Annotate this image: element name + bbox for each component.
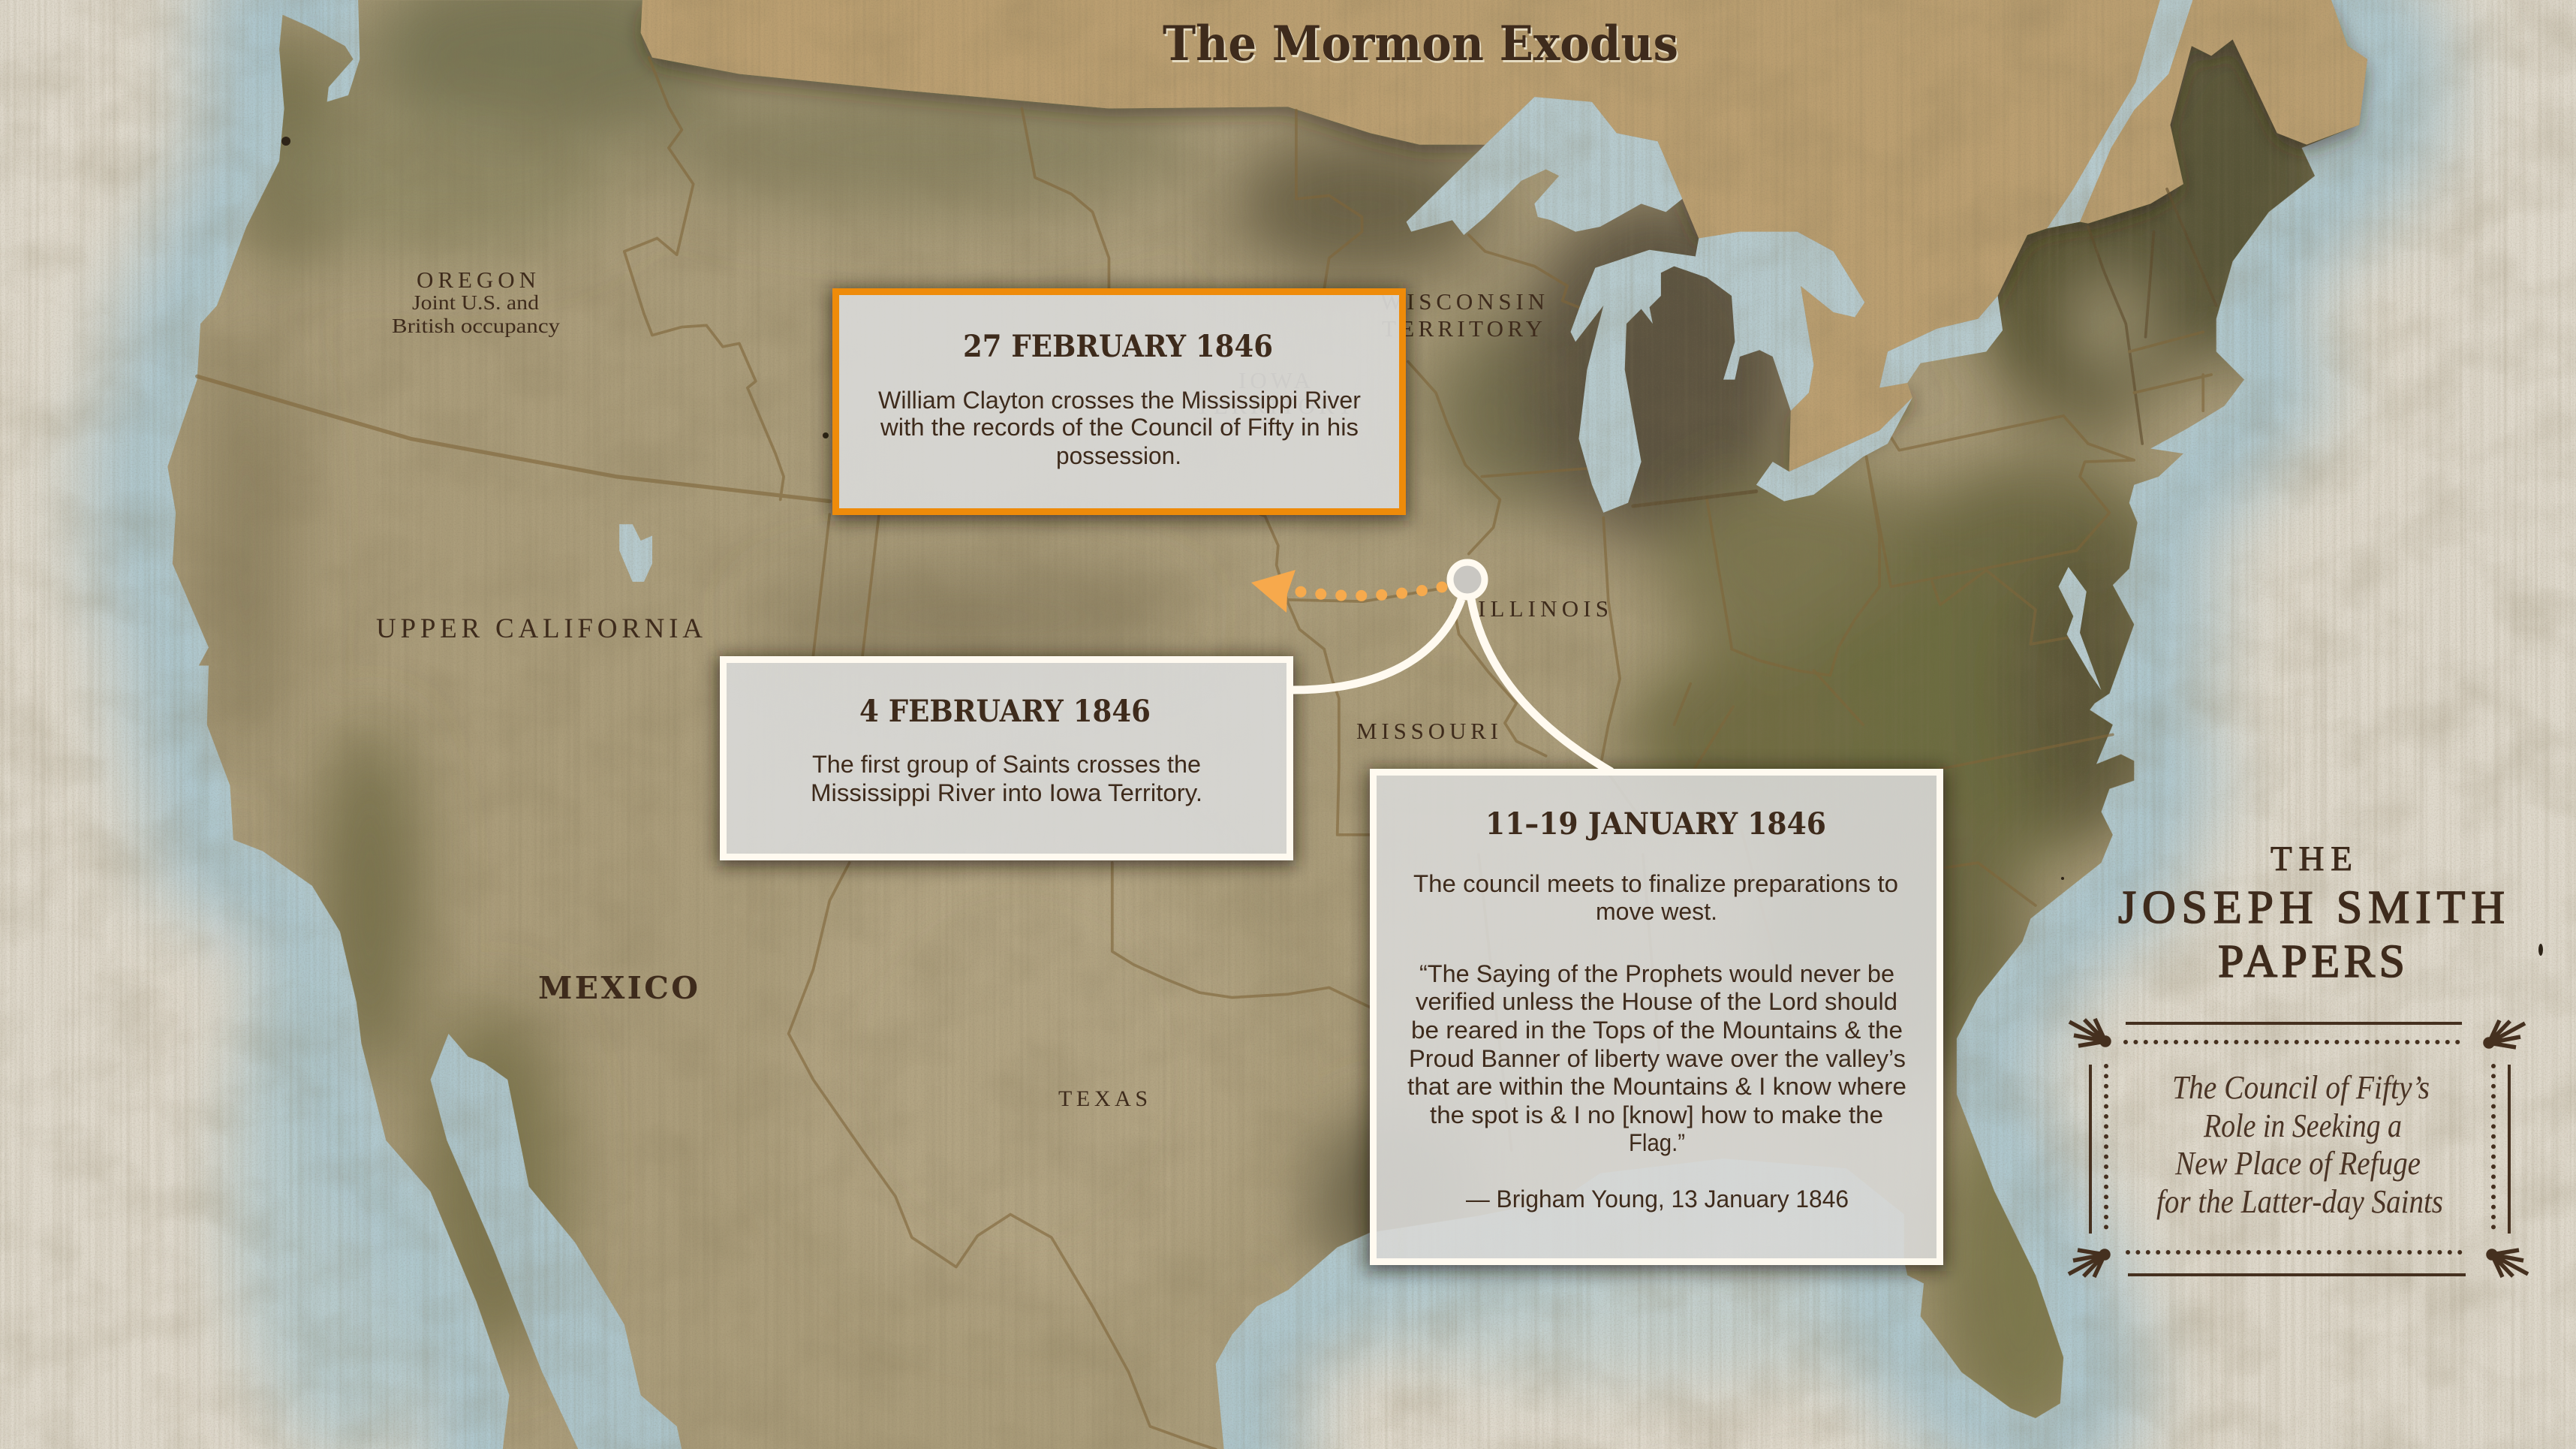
state and territory borders xyxy=(197,58,2216,1449)
callout shadows xyxy=(717,288,1946,1271)
label: Iowa Territory: IOWA xyxy=(1238,367,1311,393)
callout summary: The council meets to finalize preparations to xyxy=(1413,870,1898,897)
callout: 4 February 1846 xyxy=(724,659,1290,857)
publisher logo: The Joseph Smith Papers: PAPERS xyxy=(2218,936,2405,987)
label: Oregon: Joint U.S. and xyxy=(412,291,540,314)
label: Iowa Territory: TERRITORY xyxy=(1196,393,1353,419)
callout: 27 February 1846 xyxy=(836,291,1402,512)
subtitle: The Council of Fifty's Role: The Council of Fifty’s xyxy=(2172,1069,2430,1106)
region labels xyxy=(376,267,1608,1111)
callout quotation: Proud Banner of liberty wave over the valley’s xyxy=(1409,1045,1906,1072)
callout quotation: verified unless the House of the Lord should xyxy=(1416,988,1897,1015)
label: Oregon: OREGON xyxy=(417,267,536,293)
callout body: The first group of Saints crosses the xyxy=(812,751,1201,778)
Great Lakes and St. Lawrence xyxy=(619,0,2195,690)
callout summary xyxy=(1413,870,1898,925)
callout heading: 4 FEBRUARY 1846 xyxy=(859,694,1151,729)
publisher logo: The Joseph Smith Papers: THE xyxy=(2271,839,2352,878)
callout heading: 27 FEBRUARY 1846 xyxy=(963,329,1273,364)
callout body xyxy=(811,751,1202,806)
callout quotation: that are within the Mountains & I know where xyxy=(1407,1073,1906,1100)
label: Missouri: MISSOURI xyxy=(1356,718,1498,744)
callout body: Mississippi River into Iowa Territory. xyxy=(811,779,1202,806)
leader line to 4 February callout xyxy=(1293,599,1461,690)
callout body xyxy=(878,387,1361,469)
dotted arrow line: Clayton crossing xyxy=(1295,587,1442,595)
label: Upper California: UPPER CALIFORNIA xyxy=(376,613,703,644)
label: Wisconsin Territory xyxy=(1380,288,1545,342)
leader line to January callout xyxy=(1471,599,1612,772)
callout body: William Clayton crosses the Mississippi River xyxy=(878,387,1361,414)
map title: The Mormon Exodus xyxy=(1163,16,1678,72)
label: Iowa Territory xyxy=(1196,367,1353,419)
publisher logo: The Joseph Smith Papers xyxy=(2118,839,2505,987)
label: Oregon: British occupancy xyxy=(392,315,561,337)
publisher logo: The Joseph Smith Papers: JOSEPH SMITH xyxy=(2118,882,2505,933)
callout quotation: “The Saying of the Prophets would never be xyxy=(1419,960,1894,987)
subtitle: The Council of Fifty's Role: Role in Seeking a xyxy=(2203,1107,2402,1144)
label: Texas: TEXAS xyxy=(1058,1086,1148,1111)
label: Mexico: MEXICO xyxy=(538,970,698,1006)
callout summary: move west. xyxy=(1596,898,1717,925)
callout quotation: be reared in the Tops of the Mountains & the xyxy=(1411,1017,1903,1044)
label: Wisconsin Territory: WISCONSIN xyxy=(1380,288,1545,315)
arrow head xyxy=(1251,570,1296,613)
specks and stains xyxy=(281,137,2543,956)
label: Wisconsin Territory: TERRITORY xyxy=(1382,315,1542,342)
callout: 11–19 January 1846 xyxy=(1374,772,1940,1261)
subtitle: The Council of Fifty's Role xyxy=(2156,1069,2443,1220)
subtitle: The Council of Fifty's Role: for the Latter-day Saints xyxy=(2156,1183,2443,1220)
Canada xyxy=(641,0,2367,471)
marker: Nauvoo xyxy=(1450,562,1485,597)
callout body: possession. xyxy=(1056,442,1181,469)
callout body: with the records of the Council of Fifty in his xyxy=(880,414,1359,441)
ornament: bottom left xyxy=(2069,1250,2108,1277)
label: Illinois: ILLINOIS xyxy=(1478,595,1608,622)
ornament: bottom right xyxy=(2488,1250,2528,1277)
callout quotation xyxy=(1407,960,1906,1156)
ornament: top left xyxy=(2069,1019,2109,1046)
ornament: top right xyxy=(2485,1020,2525,1047)
quotation attribution: — Brigham Young, 13 January 1846 xyxy=(1466,1185,1849,1213)
Gulf of California xyxy=(430,1034,682,1449)
map title: The Mormon Exodus xyxy=(1164,18,1680,74)
callout heading: 11–19 JANUARY 1846 xyxy=(1485,806,1826,842)
callout quotation: the spot is & I no [know] how to make the xyxy=(1430,1101,1883,1128)
subtitle: The Council of Fifty's Role: New Place of Refuge xyxy=(2174,1145,2421,1182)
ornamental frame xyxy=(2069,1019,2528,1277)
callout quotation: Flag.” xyxy=(1629,1129,1685,1156)
label: Oregon xyxy=(392,267,561,337)
